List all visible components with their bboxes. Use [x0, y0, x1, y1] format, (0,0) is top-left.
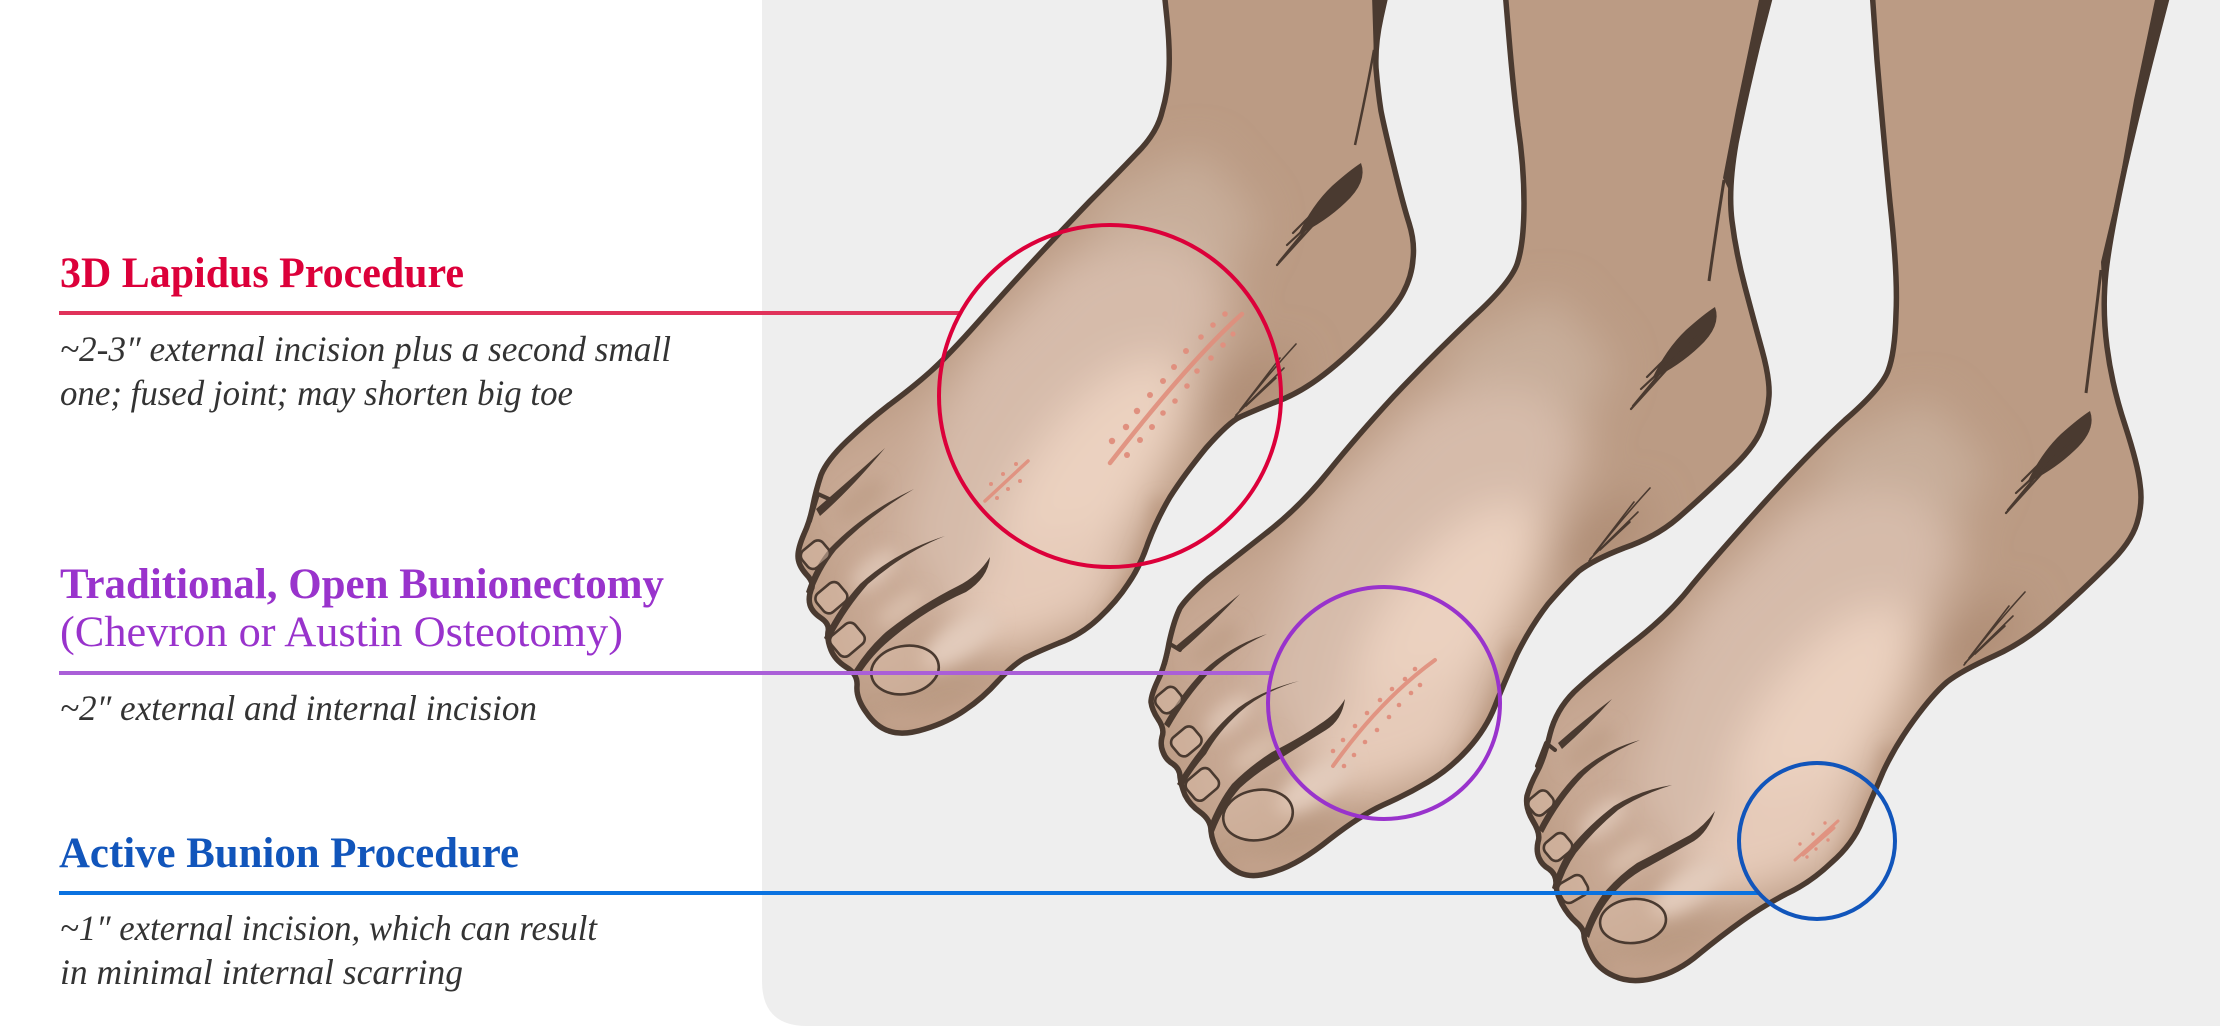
foot 2 toe lines	[1164, 594, 1345, 832]
description: Lapidus: ~2-3″ external incision plus a second small	[60, 329, 671, 369]
highlight circle: blue	[1739, 763, 1895, 919]
callout: 3D Lapidus Procedure	[59, 225, 1281, 567]
main incision with suture dots	[1109, 311, 1242, 463]
foot 1 skin shading	[780, 0, 1440, 750]
second small incision with suture dots	[985, 461, 1028, 501]
description: active bunion: ~1″ external incision, which can result	[60, 908, 598, 948]
heading: Traditional, Open Bunionectomy: Traditional, Open Bunionectomy	[60, 561, 664, 608]
foot 2 heel line	[1709, 0, 1773, 281]
foot 3 heel line	[2086, 0, 2170, 393]
foot 2 toenails	[1152, 684, 1297, 846]
highlight circle: purple	[1268, 587, 1500, 819]
leader line: red	[59, 311, 960, 315]
leader line: purple	[59, 671, 1273, 675]
foot 1 toenails	[798, 538, 943, 700]
foot 1 toe lines	[806, 448, 990, 674]
heading: 3D Lapidus Procedure: 3D Lapidus Procedure	[60, 250, 464, 297]
illustration: left foot with 3D Lapidus incisions	[780, 0, 1440, 750]
callout: Traditional, Open Bunionectomy	[59, 561, 1500, 819]
foot 3 toenails	[1525, 788, 1668, 946]
open bunionectomy incision with suture dots	[1331, 660, 1435, 768]
foot 3 toe lines	[1537, 699, 1715, 938]
heading: Active Bunion Procedure: Active Bunion Procedure	[59, 830, 519, 877]
active bunion incision with suture dots	[1795, 821, 1838, 860]
panel: grey background	[762, 0, 2220, 1026]
foot 1 heel line	[1355, 0, 1388, 145]
foot 2 tendon strokes	[1589, 307, 1717, 561]
subheading: Chevron or Austin Osteotomy: (Chevron or Austin Osteotomy)	[60, 609, 623, 656]
foot 3 tendon strokes	[1964, 411, 2092, 665]
foot 3 skin shading	[1510, 0, 2170, 1000]
highlight circle: red	[939, 225, 1281, 567]
foot 2 outline	[1151, 0, 1772, 876]
description: open bunionectomy: ~2″ external and internal incision	[60, 688, 537, 728]
foot 1 outline	[798, 0, 1414, 733]
description: Lapidus	[60, 329, 671, 413]
callout: Active Bunion Procedure	[59, 763, 1895, 992]
description: active bunion: in minimal internal scarring	[60, 952, 463, 992]
illustration: right foot with active bunion incision	[1510, 0, 2170, 1000]
foot 2 skin shading	[1130, 0, 1790, 890]
leader line: blue	[59, 891, 1760, 895]
description: Lapidus: one; fused joint; may shorten big toe	[60, 373, 573, 413]
foot 3 outline	[1527, 0, 2169, 981]
description: active bunion	[60, 908, 598, 992]
foot 1 tendon strokes	[1235, 163, 1363, 417]
illustration: middle foot with open bunionectomy incision	[1130, 0, 1790, 890]
